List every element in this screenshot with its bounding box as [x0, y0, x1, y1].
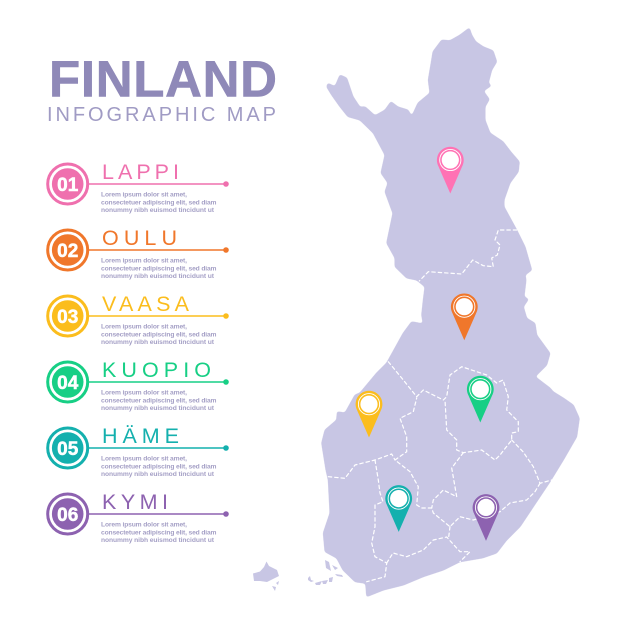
number badge 05: 05	[57, 439, 79, 460]
description: consectetuer adipiscing elit, sed diam	[101, 463, 217, 470]
list item: Lappi	[48, 160, 229, 214]
description: nonummy nibh euismod tincidunt ut	[101, 405, 215, 412]
connector line	[88, 313, 229, 319]
list item: Hame	[48, 424, 229, 478]
pin: Hame	[385, 485, 412, 532]
connector line	[88, 445, 229, 451]
region borders	[328, 230, 552, 582]
description: Lorem ipsum dolor sit amet,	[101, 522, 187, 528]
number badge 03	[48, 296, 88, 336]
list item: Kymi	[48, 490, 229, 544]
pin: Lappi	[437, 147, 464, 194]
description: Lorem ipsum dolor sit amet,	[101, 258, 187, 264]
description: nonummy nibh euismod tincidunt ut	[101, 471, 215, 478]
list item: Kuopio	[48, 358, 229, 412]
pin: Vaasa	[356, 391, 382, 438]
region name: KYMI	[102, 490, 168, 514]
description: Lorem ipsum dolor sit amet,	[101, 324, 187, 330]
number badge 05	[48, 428, 88, 468]
pin: Kuopio	[467, 376, 494, 422]
connector line	[88, 511, 229, 517]
region name: KUOPIO	[102, 358, 211, 382]
description	[101, 192, 217, 214]
number badge 04	[48, 362, 88, 402]
region name: HÄME	[102, 424, 179, 448]
description: consectetuer adipiscing elit, sed diam	[101, 331, 217, 338]
connector line	[88, 379, 229, 385]
description: nonummy nibh euismod tincidunt ut	[101, 207, 215, 214]
description: consectetuer adipiscing elit, sed diam	[101, 397, 217, 404]
description: consectetuer adipiscing elit, sed diam	[101, 265, 217, 272]
description: consectetuer adipiscing elit, sed diam	[101, 199, 217, 206]
description	[101, 456, 217, 478]
subtitle: INFOGRAPHIC MAP	[47, 104, 276, 126]
region name: LAPPI	[102, 160, 179, 184]
Aland islands	[253, 560, 343, 591]
description	[101, 258, 217, 280]
map of Finland	[253, 28, 579, 597]
list item: Oulu	[48, 226, 229, 280]
pin: Kymi	[473, 494, 499, 541]
country silhouette	[322, 28, 579, 597]
region name: VAASA	[102, 292, 190, 316]
description: nonummy nibh euismod tincidunt ut	[101, 339, 215, 346]
description: nonummy nibh euismod tincidunt ut	[101, 537, 215, 544]
description	[101, 522, 217, 544]
number badge 06: 06	[57, 505, 78, 526]
list item: Vaasa	[48, 292, 229, 346]
description: nonummy nibh euismod tincidunt ut	[101, 273, 215, 280]
description: Lorem ipsum dolor sit amet,	[101, 390, 187, 396]
pin: Oulu	[451, 293, 478, 340]
title: FINLAND	[49, 51, 277, 108]
connector line	[88, 247, 229, 253]
description: Lorem ipsum dolor sit amet,	[101, 456, 187, 462]
description: consectetuer adipiscing elit, sed diam	[101, 529, 217, 536]
description: Lorem ipsum dolor sit amet,	[101, 192, 187, 198]
number badge 02: 02	[57, 241, 78, 262]
description	[101, 324, 217, 346]
number badge 06	[48, 494, 88, 534]
region name: OULU	[102, 226, 177, 250]
number badge 01	[48, 164, 88, 204]
number badge 01: 01	[57, 175, 79, 196]
number badge 04: 04	[57, 373, 79, 394]
number badge 02	[48, 230, 88, 270]
number badge 03: 03	[57, 307, 78, 328]
connector line	[88, 181, 229, 187]
description	[101, 390, 217, 412]
